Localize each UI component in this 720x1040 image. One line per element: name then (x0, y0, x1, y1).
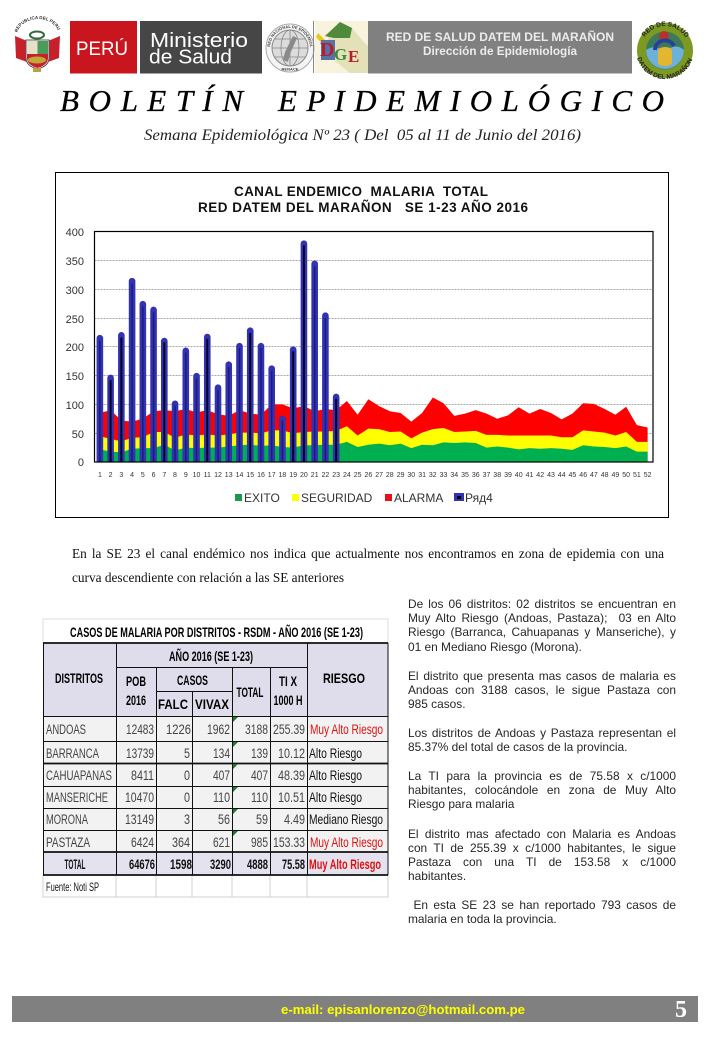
logo: Red Nacional de Epidemiología globe (266, 24, 314, 72)
x axis labels: 43 (547, 472, 555, 479)
x axis labels: 51 (633, 472, 641, 479)
legend: EXITO (244, 491, 280, 505)
table data rows: 10.51 (278, 790, 305, 805)
header banner: red de salud: RED DE SALUD DATEM DEL MARAÑON (386, 29, 614, 44)
x axis labels: 19 (289, 472, 297, 479)
x axis labels: 44 (558, 472, 566, 479)
table data rows (46, 722, 383, 850)
legend: Ряд4 (465, 491, 493, 505)
table total row: 75.58 (282, 857, 305, 872)
text block: paragraph 1: Muy Alto Riesgo (Andoas, Pastaza); 03 en Alto (408, 611, 676, 625)
table headers: AÑO 2016 (SE 1-23) (169, 647, 253, 664)
logo: Perú red block: PERÚ (76, 38, 128, 60)
text block: paragraph 4: La TI para la provincia es de 75.58 x c/1000 (408, 769, 676, 783)
x axis labels: 26 (365, 472, 372, 479)
x axis labels: 5 (141, 472, 145, 479)
chart title: CANAL ENDEMICO MALARIA TOTAL (234, 184, 488, 199)
header banner: red de salud (368, 21, 632, 74)
table data rows: Alto Riesgo (309, 768, 362, 783)
x axis labels: 24 (343, 472, 351, 479)
x axis labels: 20 (300, 472, 308, 479)
table headers: 2016 (126, 692, 146, 708)
table total row: 64676 (129, 857, 155, 872)
table data rows: 4.49 (284, 812, 305, 827)
x axis labels: 18 (279, 472, 286, 479)
x axis labels: 37 (483, 472, 490, 479)
text block: paragraph 6 (408, 898, 676, 926)
table data rows: PASTAZA (46, 835, 90, 850)
table data rows: 13739 (126, 746, 154, 761)
table data rows: 139 (251, 746, 268, 761)
table data rows: 364 (172, 835, 190, 850)
text block: paragraph 5: Pastaza con una TI de 153.58 x c/1000 (408, 855, 676, 869)
table data rows: Alto Riesgo (309, 746, 362, 761)
logo: Red de Salud Datem del Marañón: RED DE SALUD (641, 21, 688, 37)
x axis labels: 22 (322, 472, 329, 479)
table data rows: 5 (184, 746, 190, 761)
x axis labels: 39 (504, 472, 512, 479)
table data rows: 1962 (207, 722, 230, 737)
y axis labels: 50 (72, 429, 84, 441)
legend: ALARMA (394, 491, 443, 505)
x axis labels: 13 (225, 472, 233, 479)
table data rows: 3188 (245, 722, 268, 737)
y axis labels: 200 (66, 342, 84, 354)
y axis labels: 350 (66, 256, 84, 268)
x axis labels: 32 (429, 472, 437, 479)
table data rows: 0 (184, 790, 190, 805)
table headers: RIESGO (323, 670, 365, 686)
legend: SEGURIDAD (301, 491, 373, 505)
text block: paragraph 4: habitantes, colocándole en zona de Muy Alto (408, 783, 676, 797)
table data rows: 110 (213, 790, 230, 805)
table data rows: 12483 (126, 722, 154, 737)
y axis labels: 150 (66, 371, 84, 383)
text block: paragraph 4 (408, 769, 676, 811)
logo: DGE map: E (348, 47, 359, 66)
table total row (64, 857, 381, 872)
y axis labels: 300 (66, 285, 84, 297)
table data rows: 59 (256, 812, 268, 827)
logo: Red Nacional de Epidemiología globe: RENACE (282, 66, 299, 72)
x axis labels: 34 (450, 472, 458, 479)
title: B O L E T Í N (60, 83, 245, 118)
text block: paragraph 5: habitantes. (408, 869, 466, 883)
table data rows: 110 (251, 790, 268, 805)
table headers: VIVAX (195, 696, 230, 712)
table headers: POB (126, 673, 146, 689)
x axis labels: 35 (461, 472, 469, 479)
table data rows: 153.33 (273, 835, 305, 850)
x axis labels: 16 (257, 472, 265, 479)
table data rows: 407 (213, 768, 230, 783)
text block: paragraph 2 (408, 669, 676, 711)
text block: paragraph 2: Andoas con 3188 casos, le sigue Pastaza con (408, 683, 676, 697)
text block: paragraph 5: con TI de 255.39 x c/1000 habitantes, le sigue (408, 841, 676, 855)
areas: alarma, seguridad, exito (100, 397, 648, 462)
y axis labels: 0 (78, 457, 84, 469)
table total row: 4888 (247, 857, 268, 872)
table data rows: 0 (184, 768, 190, 783)
x axis labels: 33 (440, 472, 447, 479)
table headers: 1000 H (274, 692, 302, 708)
logo: DGE map (313, 21, 369, 73)
x axis labels: 52 (644, 472, 652, 479)
header banner: red de salud: Dirección de Epidemiología (423, 44, 577, 58)
table headers: TI X (279, 673, 297, 689)
subtitle: Semana Epidemiológica Nº 23 ( Del 05 al 11 de Junio del 2016) (144, 127, 581, 144)
table data rows: 56 (218, 812, 230, 827)
cell comment markers (233, 717, 238, 836)
logo: Ministerio de Salud block: Ministerio (150, 30, 248, 52)
title: E P I D E M I O L Ó G I C O (277, 83, 664, 118)
table source note: Fuente: Noti SP (46, 880, 99, 894)
x axis labels: 28 (386, 472, 394, 479)
x axis labels: 2 (109, 472, 113, 479)
table data rows: 407 (251, 768, 268, 783)
text block: paragraph 3: 85.37% del total de casos de la provincia. (408, 740, 627, 754)
table data rows: ANDOAS (46, 722, 86, 737)
table total row: TOTAL (64, 857, 86, 872)
text block: paragraph 1: Riesgo (Barranca, Cahuapanas y Manseriche), y (408, 625, 676, 639)
text block: paragraph 1: 01 en Mediano Riesgo (Morona). (408, 640, 582, 654)
table data rows: 13149 (125, 812, 154, 827)
text block: paragraph 3: Los distritos de Andoas y Pastaza representan el (408, 726, 676, 740)
title (60, 83, 664, 118)
x axis labels: 7 (162, 472, 166, 479)
logo: Red de Salud Datem del Marañón (637, 21, 693, 80)
logo: Ministerio de Salud block (140, 21, 262, 74)
table data rows: 8411 (131, 768, 154, 783)
x axis labels: 40 (515, 472, 523, 479)
x axis labels: 38 (493, 472, 501, 479)
bars: cases per week (100, 244, 336, 462)
y axis labels (66, 227, 84, 469)
text block: paragraph 5 (408, 827, 676, 883)
table data rows: 3 (184, 812, 190, 827)
table data rows: 6424 (131, 835, 154, 850)
x axis labels (98, 472, 652, 479)
x axis labels: 50 (622, 472, 630, 479)
table data rows: 621 (213, 835, 230, 850)
y axis labels: 250 (66, 314, 84, 326)
x axis labels: 45 (569, 472, 576, 479)
table data rows: CAHUAPANAS (46, 768, 112, 783)
table data rows: 985 (251, 835, 268, 850)
text block: chart interpretation: En la SE 23 el canal endémico nos indica que actualmente nos encontramos en zona de epidemia con una (72, 546, 664, 561)
x axis labels: 49 (612, 472, 619, 479)
table data rows: 48.39 (278, 768, 305, 783)
text block: paragraph 3 (408, 726, 676, 754)
logo: Perú red block (70, 21, 137, 74)
x axis labels: 21 (311, 472, 319, 479)
x axis labels: 47 (590, 472, 598, 479)
x axis labels: 36 (472, 472, 480, 479)
x axis labels: 4 (130, 472, 134, 479)
table total row: 1598 (170, 857, 192, 872)
legend (235, 491, 493, 505)
text block: paragraph 2: El distrito que presenta mas casos de malaria es (408, 669, 676, 683)
table total row: 3290 (210, 857, 231, 872)
x axis labels: 41 (526, 472, 533, 479)
table headers: CASOS (177, 672, 208, 688)
x axis labels: 25 (354, 472, 362, 479)
logo: Ministerio de Salud block: de Salud (149, 46, 232, 68)
x axis labels: 15 (246, 472, 254, 479)
table data rows: 10470 (125, 790, 154, 805)
x axis labels: 27 (375, 472, 383, 479)
text block: paragraph 6: En esta SE 23 se han reportado 793 casos de (413, 898, 676, 912)
text block: paragraph 1 (408, 597, 676, 654)
table data rows: BARRANCA (46, 746, 99, 761)
chart title: RED DATEM DEL MARAÑON SE 1-23 AÑO 2016 (198, 200, 528, 215)
x axis labels: 46 (579, 472, 587, 479)
footer email: e-mail: episanlorenzo@hotmail.com.pe (281, 1002, 525, 1017)
x axis labels: 12 (214, 472, 222, 479)
text block: chart interpretation (72, 546, 664, 585)
table data rows: MORONA (46, 812, 88, 827)
x axis labels: 8 (173, 472, 177, 479)
table headers: TOTAL (236, 684, 264, 700)
text block: chart interpretation: curva descendiente con relación a las SE anteriores (72, 570, 344, 585)
header logos band (14, 16, 368, 74)
table data rows: 1226 (166, 722, 191, 737)
x axis labels: 30 (407, 472, 415, 479)
x axis labels: 23 (332, 472, 340, 479)
x axis labels: 6 (152, 472, 156, 479)
table: malaria cases by district (42, 618, 388, 898)
table data rows: 255.39 (273, 722, 305, 737)
x axis labels: 42 (536, 472, 544, 479)
icon: coat of arms of Peru (14, 16, 60, 72)
text block: paragraph 2: 985 casos. (408, 697, 466, 711)
icon: coat of arms of Peru: REPUBLICA DEL PERU (14, 16, 60, 32)
x axis labels: 1 (98, 472, 102, 479)
y axis labels: 100 (66, 400, 84, 412)
logo: DGE map: D (320, 39, 334, 61)
x axis labels: 31 (418, 472, 426, 479)
x axis labels: 11 (204, 472, 211, 479)
x axis labels: 10 (193, 472, 200, 479)
table headers: FALC (158, 696, 188, 712)
table headers: DISTRITOS (55, 670, 103, 686)
text block: paragraph 4: Riesgo para malaria (408, 797, 514, 811)
table data rows: 10.12 (278, 746, 305, 761)
text block: paragraph 1: De los 06 distritos: 02 distritos se encuentran en (408, 597, 676, 611)
x axis labels: 14 (236, 472, 243, 479)
text block: paragraph 6: malaria en toda la provincia. (408, 912, 557, 926)
logo: Red de Salud Datem del Marañón: DATEM DEL MARAÑON (637, 57, 692, 80)
x axis labels: 48 (601, 472, 609, 479)
x axis labels: 17 (268, 472, 276, 479)
x axis labels: 9 (184, 472, 188, 479)
panel: endemic channel chart (55, 172, 669, 518)
x axis labels: 29 (397, 472, 405, 479)
table data rows: 134 (213, 746, 230, 761)
y axis labels: 400 (66, 227, 84, 239)
table data rows: MANSERICHE (46, 790, 108, 805)
text block: paragraph 5: El distrito mas afectado con Malaria es Andoas (408, 827, 676, 841)
chart title (198, 184, 528, 215)
footer bar (12, 996, 698, 1022)
x axis labels: 3 (119, 472, 123, 479)
logo: DGE map: G (334, 45, 347, 64)
table headers (55, 647, 365, 712)
table data rows: Alto Riesgo (309, 790, 362, 805)
